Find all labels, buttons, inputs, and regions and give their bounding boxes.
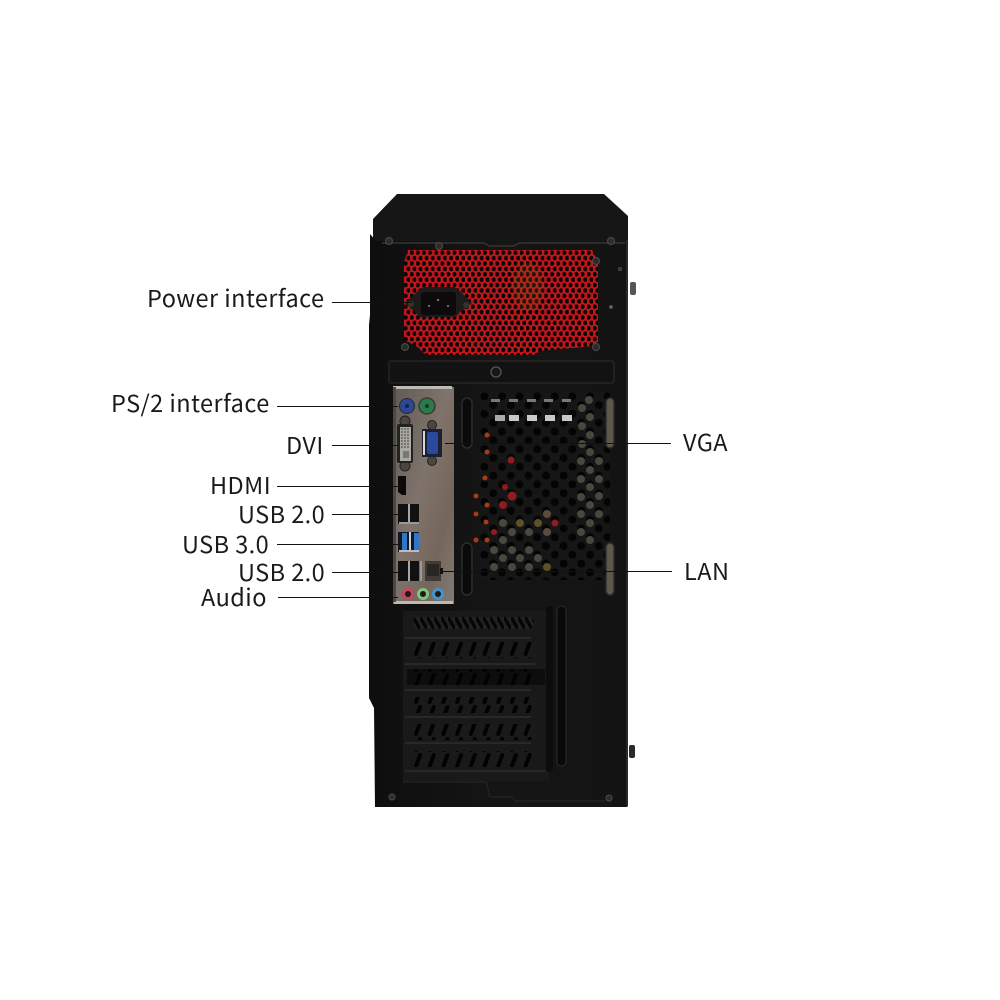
side thumbscrews — [629, 282, 636, 758]
computer case rear view — [369, 194, 636, 807]
callout: Audio: Audio — [201, 579, 267, 613]
USB 3.0 ports — [398, 532, 419, 552]
HDMI port — [398, 476, 406, 495]
vent highlights — [491, 399, 572, 421]
callout: USB 2.0 upper: USB 2.0 — [238, 496, 325, 530]
slot retainer bars — [546, 606, 566, 772]
callout: DVI: DVI — [286, 427, 324, 461]
callout: HDMI: HDMI — [210, 467, 271, 501]
callout: LAN: LAN — [684, 553, 729, 587]
USB 2.0 ports upper — [398, 504, 419, 524]
LAN port — [425, 561, 443, 581]
expansion bracket bar — [389, 361, 614, 383]
I/O shield plate — [393, 386, 454, 604]
VGA port — [422, 420, 442, 466]
power supply vent — [404, 250, 598, 355]
callout: DVI — [286, 427, 398, 461]
vent side slots — [462, 398, 614, 595]
audio jacks — [404, 590, 442, 598]
callout: Power interface: Power interface — [147, 280, 325, 314]
rear fan vent — [474, 392, 610, 580]
expansion slots — [403, 606, 605, 801]
DVI port — [397, 416, 413, 471]
PS/2 ports — [400, 398, 435, 414]
case screws — [386, 238, 622, 801]
callout: USB 2.0 lower: USB 2.0 — [238, 554, 325, 588]
callout: PS/2 interface: PS/2 interface — [111, 385, 270, 419]
callout: USB 3.0: USB 3.0 — [182, 526, 269, 560]
USB 2.0 ports lower — [398, 561, 422, 581]
power inlet — [405, 287, 472, 317]
callout: VGA: VGA — [683, 424, 728, 458]
case body — [369, 234, 628, 807]
top cover — [373, 194, 628, 243]
